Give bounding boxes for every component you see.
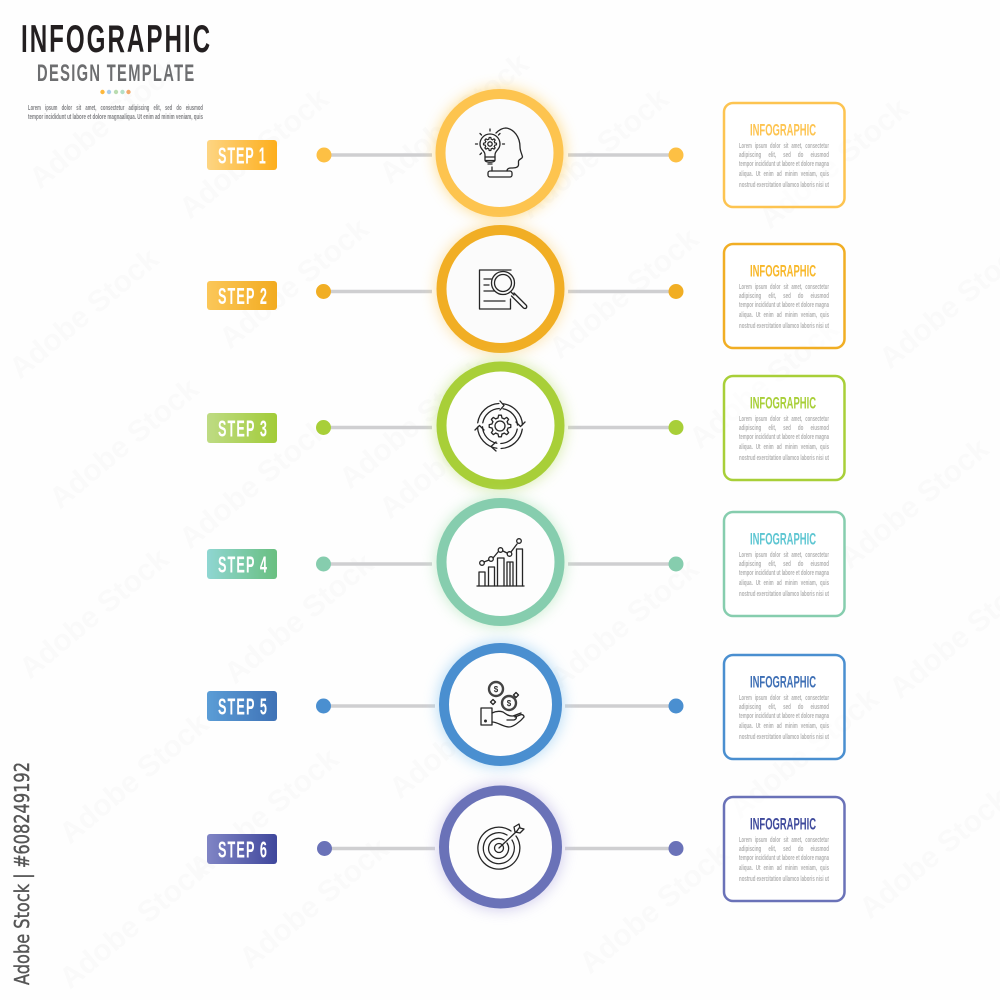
step 5 info box: Lorem ipsum dolor sit amet, consectetur [739, 695, 829, 702]
step 3 badge [207, 413, 277, 443]
text: Adobe Stock [218, 547, 380, 690]
step 2 info box [724, 244, 844, 348]
step 1 row [207, 88, 844, 218]
step 4 circle [436, 497, 566, 627]
step 6 connector [317, 841, 684, 856]
step 4 info box: tempor incididunt ut labore et dolore magna [739, 570, 829, 577]
step 3 info box: INFOGRAPHIC [750, 394, 816, 412]
step 2 badge: STEP 2 [218, 283, 267, 309]
step 2 info box: nostrud exercitation ullamco laboris nisi ut [739, 323, 829, 330]
step 4 info box: aliqua. Ut enim ad minim veniam, quis [739, 580, 829, 587]
step 5 info box [724, 655, 844, 759]
title: Infographic: INFOGRAPHIC [21, 17, 210, 60]
step 5 badge: STEP 5 [218, 693, 267, 719]
step 4 row [207, 497, 844, 627]
step 2 info box: adipiscing elit, sed do eiusmod [739, 293, 829, 300]
icon: hand holding coins: $ [494, 685, 499, 694]
text: Adobe Stock [573, 837, 735, 980]
step 3 info box: Lorem ipsum dolor sit amet, consectetur [739, 416, 829, 423]
step 5 badge [207, 691, 277, 721]
step 1 info box: tempor incididunt ut labore et dolore magna [739, 161, 829, 168]
step 5 info box: INFOGRAPHIC [750, 672, 816, 692]
step 6 info box: aliqua. Ut enim ad minim veniam, quis [739, 865, 829, 872]
step 4 connector [316, 556, 684, 572]
step 6 info box: INFOGRAPHIC [750, 814, 816, 834]
text: Adobe Stock [683, 312, 845, 455]
step 2 info box: tempor incididunt ut labore et dolore magna [739, 302, 829, 309]
step 3 info box: aliqua. Ut enim ad minim veniam, quis [739, 444, 829, 451]
step 3 badge: STEP 3 [218, 415, 267, 441]
text: Adobe Stock [183, 742, 345, 885]
text: Adobe Stock [3, 242, 165, 385]
text: Adobe Stock [383, 662, 545, 805]
step 1 info box: INFOGRAPHIC [750, 120, 816, 140]
step 5 row [207, 642, 844, 768]
vertical stock credit: Adobe Stock | #608249192 [10, 762, 34, 985]
decorative colour dots [100, 90, 131, 94]
step 2 info box: aliqua. Ut enim ad minim veniam, quis [739, 312, 829, 319]
step 6 badge: STEP 6 [218, 836, 267, 862]
intro text block [28, 105, 203, 121]
text: Adobe Stock [373, 382, 535, 525]
step 3 info box [724, 376, 844, 480]
step 5 info box: aliqua. Ut enim ad minim veniam, quis [739, 723, 829, 730]
step 6 info box: tempor incididunt ut labore et dolore magna [739, 855, 829, 862]
icon: head with light bulb gear [476, 128, 522, 177]
step 1 info box: adipiscing elit, sed do eiusmod [739, 152, 829, 159]
icon: target with arrow [478, 824, 524, 869]
step 3 info box: nostrud exercitation ullamco laboris nisi ut [739, 455, 829, 462]
step 2 info box: Lorem ipsum dolor sit amet, consectetur [739, 284, 829, 291]
step 4 info box: nostrud exercitation ullamco laboris nisi ut [739, 591, 829, 598]
step 2 connector [316, 284, 684, 299]
text: Adobe Stock [333, 352, 495, 495]
step 5 info box: adipiscing elit, sed do eiusmod [739, 704, 829, 711]
step 5 info box: nostrud exercitation ullamco laboris nisi ut [739, 734, 829, 741]
step 3 info box: adipiscing elit, sed do eiusmod [739, 425, 829, 432]
step 6 circle [438, 784, 564, 910]
text: Adobe Stock [213, 212, 375, 355]
step 6 info box: nostrud exercitation ullamco laboris nisi ut [739, 876, 829, 883]
step 2 info box: INFOGRAPHIC [750, 262, 816, 280]
text: Adobe Stock [173, 412, 335, 555]
step 1 info box [724, 103, 844, 207]
text: Adobe Stock [373, 47, 535, 190]
text: Adobe Stock [53, 852, 215, 995]
text: Adobe Stock [43, 372, 205, 515]
step 3 circle [436, 360, 566, 490]
step 3 row [207, 360, 844, 490]
text: Adobe Stock [833, 432, 995, 575]
icon: hand holding coins [481, 682, 524, 727]
step 5 circle [438, 642, 564, 768]
text: Adobe Stock [543, 552, 705, 695]
text: Adobe Stock [543, 222, 705, 365]
icon: gear with circular arrows [475, 401, 525, 451]
step 4 info box: Lorem ipsum dolor sit amet, consectetur [739, 552, 829, 559]
step 1 info box: Lorem ipsum dolor sit amet, consectetur [739, 143, 829, 150]
text: Adobe Stock [753, 92, 915, 235]
step 1 connector [316, 148, 684, 162]
step 4 badge [207, 549, 277, 579]
text: Adobe Stock [723, 682, 885, 825]
step 1 badge [207, 140, 277, 170]
step 3 info box: tempor incididunt ut labore et dolore magna [739, 434, 829, 441]
intro text block: tempor incididunt ut labore et dolore magnaaliqua. Ut enim ad minim veniam, quis [28, 114, 203, 121]
text: Adobe Stock [173, 82, 335, 225]
step 4 info box [724, 512, 844, 616]
text: Adobe Stock [13, 542, 175, 685]
step 5 connector [316, 698, 684, 714]
text: Adobe Stock [53, 707, 215, 850]
step 3 connector [316, 420, 684, 435]
text: Adobe Stock [513, 82, 675, 225]
step 1 info box: aliqua. Ut enim ad minim veniam, quis [739, 171, 829, 178]
step 6 info box: adipiscing elit, sed do eiusmod [739, 846, 829, 853]
step 6 row [207, 784, 844, 910]
step 6 badge [207, 834, 277, 864]
step 2 badge [207, 281, 277, 310]
icon: rising bar chart [477, 539, 524, 586]
step 6 info box [724, 797, 844, 901]
step 4 info box: adipiscing elit, sed do eiusmod [739, 561, 829, 568]
step 4 badge: STEP 4 [218, 551, 267, 577]
step 2 row [207, 224, 844, 354]
step 1 circle [435, 88, 565, 218]
icon: hand holding coins: $ [507, 699, 512, 708]
icon: document with magnifier [480, 270, 527, 309]
step 4 info box: INFOGRAPHIC [750, 530, 816, 548]
text: Adobe Stock [23, 52, 185, 195]
intro text block: Lorem ipsum dolor sit amet, consectetur adipiscing elit, sed do eiusmod [28, 105, 203, 112]
step 6 info box: Lorem ipsum dolor sit amet, consectetur [739, 837, 829, 844]
step 2 circle [436, 224, 566, 354]
subtitle: Design Template: DESIGN TEMPLATE [37, 60, 194, 87]
text: Adobe Stock [233, 832, 395, 975]
step 5 info box: tempor incididunt ut labore et dolore magna [739, 713, 829, 720]
step 1 badge: STEP 1 [218, 142, 266, 168]
step 1 info box: nostrud exercitation ullamco laboris nisi ut [739, 182, 829, 189]
